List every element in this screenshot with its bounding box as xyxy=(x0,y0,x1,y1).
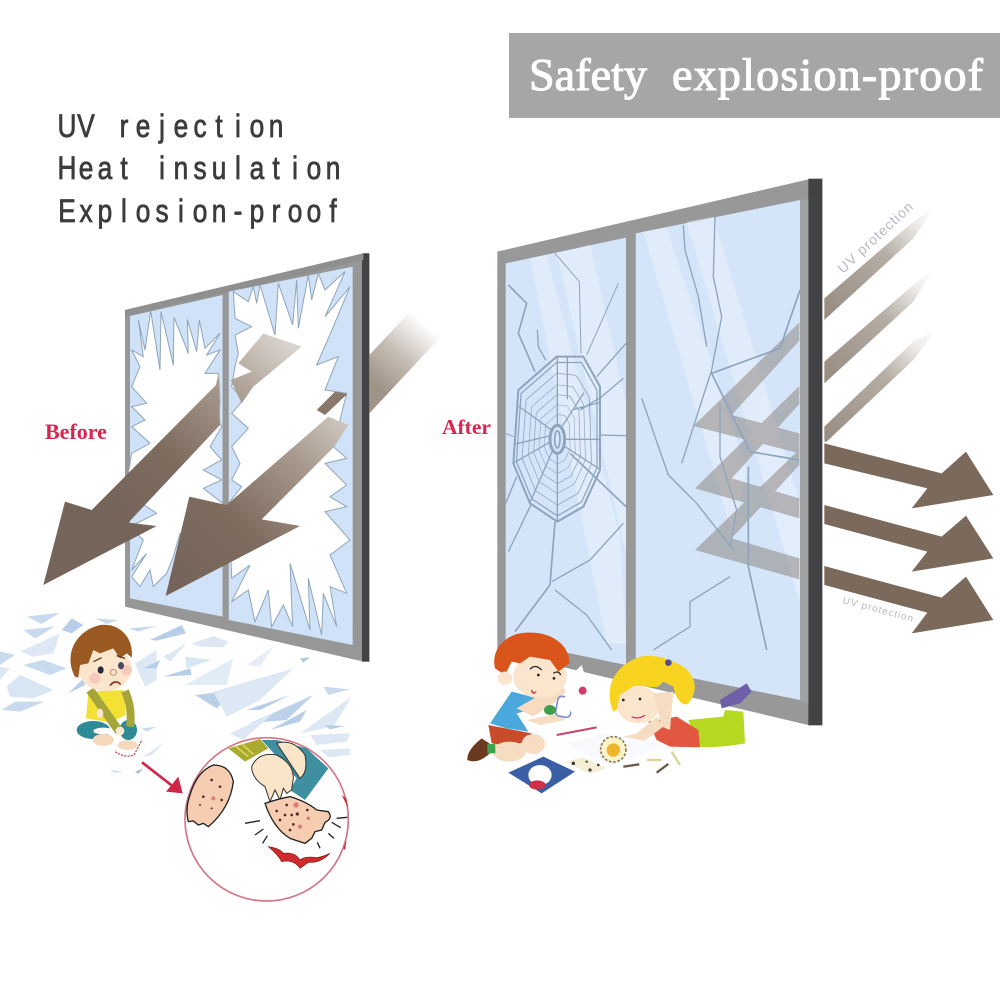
before window with shattered glass xyxy=(43,253,453,662)
red pointer arrow xyxy=(142,762,183,793)
mullion xyxy=(223,292,229,622)
magnified circle showing skin rash xyxy=(185,738,348,901)
feature list: Heat insulation xyxy=(58,152,340,187)
after label: After xyxy=(442,415,491,439)
sleeve xyxy=(228,739,268,762)
top hand xyxy=(277,742,306,778)
arrow one, upper fragment xyxy=(231,333,302,403)
arrow two xyxy=(166,417,348,596)
before label: Before xyxy=(45,419,107,444)
faded rays entering window xyxy=(824,207,935,320)
arrow one xyxy=(43,373,220,585)
title banner: explosion-proof xyxy=(672,49,984,100)
crayons xyxy=(565,752,680,774)
sleeves xyxy=(90,690,119,732)
glass highlights xyxy=(530,217,800,643)
red pain burst xyxy=(268,847,330,868)
girl xyxy=(603,656,752,748)
after window with cracked glass xyxy=(497,179,993,725)
title banner: Safety xyxy=(529,49,647,100)
rash dots xyxy=(199,779,310,831)
title banner xyxy=(509,33,1000,118)
main hand xyxy=(252,754,293,802)
boy xyxy=(467,633,573,762)
arrow two, upper fragment xyxy=(317,392,347,415)
left foot xyxy=(187,765,233,827)
picture card xyxy=(508,757,575,793)
ghost arrows seen through glass xyxy=(693,323,799,579)
feature list xyxy=(58,110,340,230)
exit arrow 1 xyxy=(824,443,993,508)
children playing under the window xyxy=(467,633,752,793)
feature list: UV rejection xyxy=(58,110,283,145)
pink pen xyxy=(557,727,597,735)
shattered hole in left pane xyxy=(128,311,223,587)
exit arrow 3 xyxy=(824,566,993,633)
white paper star xyxy=(565,665,593,717)
shattered hole in right pane xyxy=(229,272,350,635)
sad boy sitting on the floor xyxy=(70,625,142,756)
right foot xyxy=(265,797,330,843)
uv protection label upper: UV protection xyxy=(834,198,917,276)
spider-web impact point xyxy=(513,356,600,522)
pain marks xyxy=(245,817,347,848)
child drawing xyxy=(567,733,667,767)
mullion xyxy=(626,233,636,668)
feature list: Explosion-proof xyxy=(58,195,337,230)
trouser leg xyxy=(262,740,328,800)
cracks xyxy=(506,217,800,650)
broken glass shards on floor xyxy=(0,613,352,774)
exit arrow 2 xyxy=(824,505,993,572)
uv protection label lower: UV protection xyxy=(841,595,915,625)
arrow shaft behind window xyxy=(369,312,453,413)
